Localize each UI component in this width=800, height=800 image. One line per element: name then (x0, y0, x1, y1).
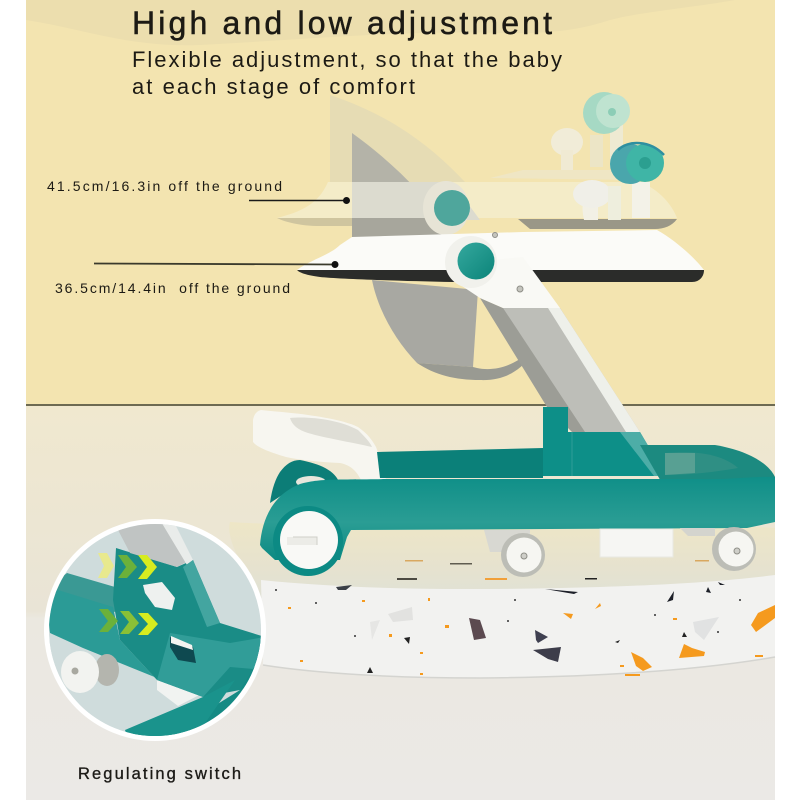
walker column (543, 407, 666, 476)
main arm (45, 590, 157, 730)
diamond hole (143, 582, 175, 610)
subtitle: Flexible adjustment, so that the baby (132, 47, 562, 72)
ghost toys (490, 92, 640, 180)
wheel (61, 651, 119, 693)
tray knob (445, 236, 497, 288)
title: High and low adjustment (132, 5, 552, 41)
bracket (113, 548, 265, 697)
terrazzo chips (275, 545, 775, 676)
slot (170, 637, 196, 663)
height label upper: 41.5cm/16.3in off the ground (47, 178, 282, 194)
rear rail (56, 573, 115, 612)
ghost toys lower (573, 143, 664, 220)
frame leg (480, 298, 640, 432)
ghost knob (423, 181, 470, 235)
subtitle: at each stage of comfort (132, 74, 415, 99)
inset circle: regulating switch (40, 518, 272, 745)
yellow arrows top row (98, 553, 157, 579)
ghost raised seat and tray (277, 92, 677, 238)
rear seat pad (253, 410, 386, 480)
center block (600, 529, 673, 557)
seat strap (417, 353, 530, 380)
front caster left (484, 530, 545, 577)
pointer lines (94, 197, 350, 268)
terrazzo platform (229, 522, 775, 678)
rear wheel (273, 506, 343, 576)
lower floor (50, 633, 157, 732)
fold (183, 560, 220, 627)
walker base (260, 445, 775, 560)
fabric seat (372, 280, 478, 367)
front caster right (680, 527, 756, 571)
rivets (492, 232, 523, 292)
inset caption: Regulating switch (78, 765, 241, 783)
height label lower: 36.5cm/14.4in off the ground (55, 280, 290, 296)
leg (118, 524, 186, 567)
rear axle hub and arch (270, 460, 340, 503)
yellow arrows bottom row (99, 609, 158, 635)
tray (297, 230, 704, 308)
